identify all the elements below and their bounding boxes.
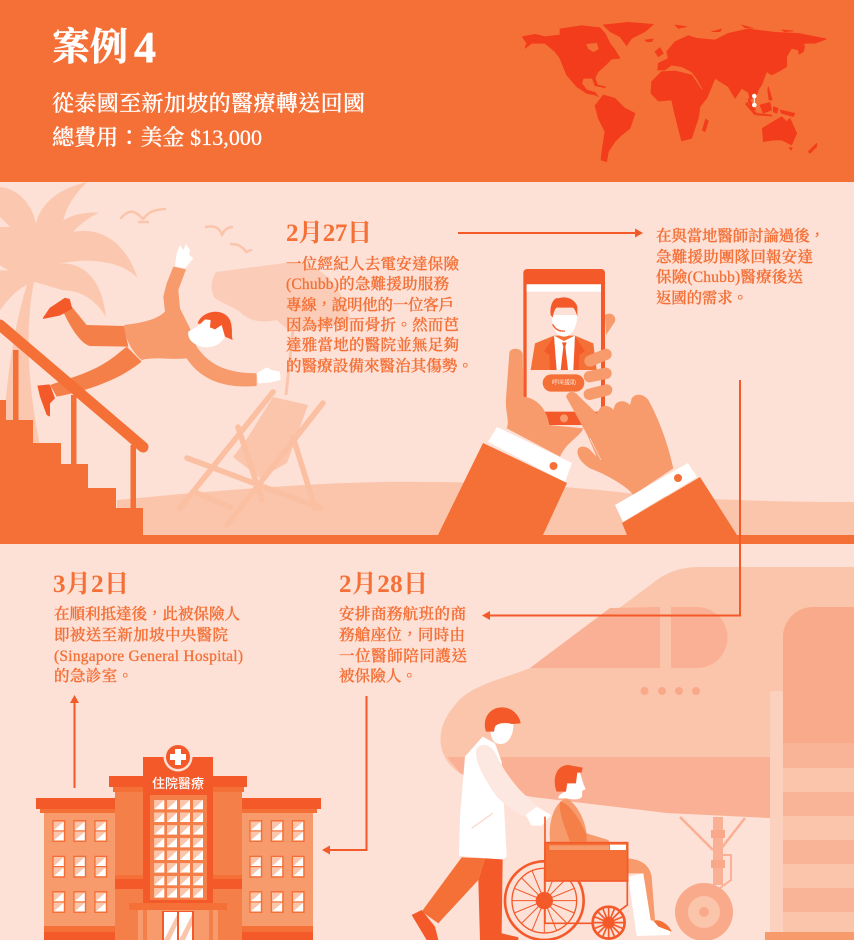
- home button: [560, 414, 568, 422]
- landing gear: [675, 817, 745, 940]
- seat: [545, 843, 628, 881]
- body: 3月2日: 的急診室。: [54, 667, 133, 685]
- patient leg: [628, 858, 655, 922]
- body: 2月27日: 的醫療設備來醫治其傷勢。: [286, 356, 473, 375]
- seagulls: [121, 209, 251, 252]
- heading: 2月28日: 2月28日: [339, 570, 428, 598]
- falling man: [37, 244, 281, 417]
- icon: medical cross: [164, 742, 192, 772]
- door: [783, 607, 854, 940]
- route markers: [752, 94, 757, 107]
- right cuff and sleeve: [615, 463, 697, 522]
- left wing: [36, 798, 115, 940]
- staircase: [0, 400, 143, 536]
- cockpit windows: [530, 607, 727, 668]
- belly: [447, 757, 770, 818]
- hair: [555, 765, 583, 792]
- patient in wheelchair: [505, 765, 672, 940]
- body: 3月2日: [54, 604, 243, 685]
- arrow: to hospital: [322, 696, 366, 854]
- body: 2月27日: 一位經紀人去電安達保險: [286, 254, 459, 273]
- heading: 3月2日: 3月2日: [53, 570, 129, 598]
- body: 3月2日: 在順利抵達後，此被保險人: [54, 604, 240, 623]
- ground strip: [0, 535, 854, 544]
- handrail and posts: [0, 325, 143, 510]
- front leg: [478, 858, 518, 940]
- torso: [550, 798, 610, 844]
- body: 2月27日: 達雅當地的醫院並無足夠: [286, 335, 459, 354]
- boarding stairs: [765, 743, 854, 940]
- hospital sign text: 住院醫療: [152, 776, 204, 791]
- header band: [0, 0, 854, 182]
- body: 2月27日: 專線，說明他的一位客戶: [286, 296, 454, 314]
- arrow: to discussion: [458, 228, 643, 238]
- toe: [653, 920, 672, 932]
- armrest: [549, 845, 609, 850]
- hands: [175, 244, 281, 383]
- title: [52, 23, 156, 72]
- arm: [560, 802, 587, 842]
- gripping fingers: [589, 354, 607, 394]
- fuselage: [441, 567, 854, 840]
- phone with hands: [438, 269, 737, 535]
- body: 2月27日: 因為摔倒而骨折。然而芭: [286, 316, 459, 334]
- hair: [198, 312, 233, 340]
- torso and arms: [124, 267, 257, 386]
- body: 2月28日: 一位醫師陪同護送: [339, 647, 467, 665]
- doctor: [412, 707, 550, 940]
- body: 3月2日: (Singapore General Hospital): [54, 648, 243, 665]
- left hand: [506, 349, 583, 457]
- far leg: [50, 347, 142, 397]
- rear shoe: [412, 910, 438, 940]
- hair: [485, 707, 521, 732]
- phone screen: [527, 284, 601, 412]
- body: 2月27日: (Chubb)的急難援助服務: [286, 274, 449, 293]
- head: [490, 723, 513, 744]
- body: 2月28日: 被保險人。: [339, 667, 417, 685]
- big wheel: [505, 861, 584, 940]
- title: 4: [134, 23, 156, 72]
- hand: [527, 808, 550, 825]
- tower windows: [154, 800, 203, 898]
- agent portrait: [531, 297, 597, 370]
- entrance: [129, 903, 227, 940]
- coat: [459, 737, 507, 859]
- heading: 2月27日: 2月27日: [286, 219, 372, 247]
- pocket line: [472, 813, 493, 828]
- phone body: [523, 269, 605, 425]
- subtitle: 從泰國至新加坡的醫療轉送回國: [52, 91, 365, 116]
- arrow: up to emergency room: [70, 695, 79, 788]
- right wing: [242, 798, 321, 940]
- body: discussion: 返國的需求。: [656, 289, 748, 307]
- airplane: [441, 567, 854, 940]
- beach umbrella: [212, 262, 350, 395]
- phone and hands drawing: [506, 269, 673, 495]
- face: [188, 318, 227, 347]
- body: 2月28日: [339, 604, 467, 685]
- body: 2月27日: [286, 254, 473, 375]
- porthole dots: [640, 687, 700, 695]
- body: discussion: 急難援助團隊回報安達: [656, 247, 813, 266]
- top finger: [605, 314, 615, 335]
- small wheel: [593, 907, 625, 939]
- palm tree: [0, 182, 137, 445]
- body: discussion: 在與當地醫師討論過後，: [656, 226, 825, 245]
- wing windows: [52, 820, 305, 913]
- upper shoe: [43, 298, 72, 318]
- chair frame: [545, 817, 627, 923]
- central block: [109, 757, 247, 940]
- title: 案例: [52, 27, 128, 69]
- rear leg: [422, 857, 485, 923]
- left cuff and sleeve: [488, 427, 572, 482]
- body: discussion: 保險(Chubb)醫療後送: [656, 267, 803, 286]
- body: 2月28日: 務艙座位，同時由: [339, 626, 465, 644]
- hospital: [36, 742, 321, 940]
- call button: [543, 374, 584, 392]
- right hand: [566, 392, 673, 495]
- body: discussion: [656, 226, 825, 307]
- arrow: down to flight: [482, 380, 740, 620]
- sleeve: [476, 745, 542, 820]
- total cost: 總費用：美金 $13,000: [52, 125, 262, 150]
- head: [558, 772, 586, 799]
- body: 2月28日: 安排商務航班的商: [339, 604, 466, 623]
- door frame: [770, 691, 783, 932]
- far shoe: [37, 384, 55, 417]
- cast: [628, 873, 670, 936]
- upper leg: [62, 307, 128, 347]
- world map: [522, 22, 827, 162]
- deck chair: [180, 392, 323, 525]
- ground dune: upper scene: [117, 482, 854, 536]
- phone and hands drawing: 呼叫援助: [552, 379, 576, 387]
- body: 3月2日: 即被送至新加坡中央醫院: [54, 626, 228, 644]
